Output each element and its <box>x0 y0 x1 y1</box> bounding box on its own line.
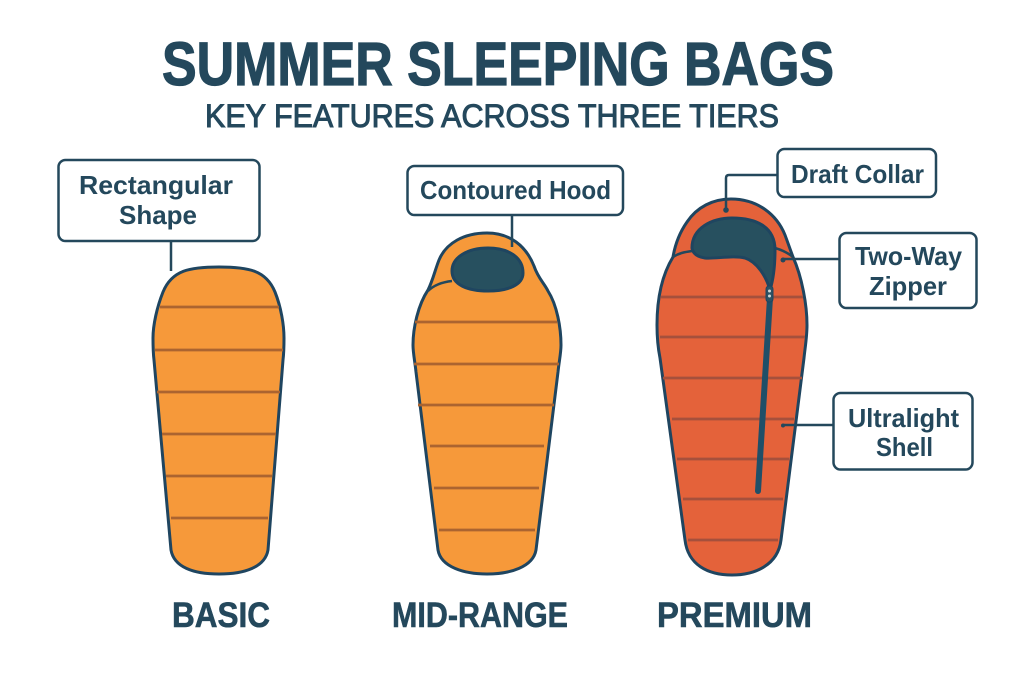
callout: rectangular shape: Shape <box>119 200 197 230</box>
panel: mid-range sleeping bag <box>392 166 623 635</box>
hood opening: mid-range <box>452 248 523 291</box>
draft collar and hood opening: premium <box>692 218 775 290</box>
leader: rectangular shape <box>170 241 172 271</box>
callout: rectangular shape: Rectangular <box>79 170 233 200</box>
leader: two-way zipper <box>780 258 839 262</box>
callout: ultralight shell <box>834 393 972 470</box>
hood seam: mid-range <box>428 281 452 291</box>
bag baffles: basic <box>155 307 283 518</box>
callout: contoured hood <box>408 166 623 215</box>
leader: ultralight shell <box>781 424 833 428</box>
callout: rectangular shape <box>58 160 260 241</box>
label: mid-range: MID-RANGE <box>392 596 568 635</box>
subtitle: KEY FEATURES ACROSS THREE TIERS <box>205 98 779 134</box>
callout: contoured hood: Contoured Hood <box>420 175 611 205</box>
bag body: mid-range <box>413 233 561 574</box>
callout: two-way zipper: Zipper <box>869 271 947 301</box>
label: premium: PREMIUM <box>657 596 812 635</box>
leader: draft collar <box>723 175 777 213</box>
callout: draft collar: Draft Collar <box>791 159 924 189</box>
bag baffles: premium <box>660 297 805 540</box>
label: basic: BASIC <box>172 596 270 635</box>
callout: draft collar <box>778 149 936 197</box>
zipper track <box>758 298 770 491</box>
callout: two-way zipper <box>840 233 976 308</box>
callout: ultralight shell: Shell <box>876 432 933 462</box>
bag baffles: mid-range <box>414 322 559 530</box>
bag body: basic <box>153 267 284 574</box>
panel: basic sleeping bag <box>58 160 284 635</box>
panel: premium sleeping bag <box>657 149 976 635</box>
bag body: premium <box>657 199 807 575</box>
callout: ultralight shell: Ultralight <box>848 403 959 433</box>
zipper pull <box>766 286 773 302</box>
leader: contoured hood <box>511 215 513 247</box>
callout: two-way zipper: Two-Way <box>855 241 963 271</box>
title: SUMMER SLEEPING BAGS <box>162 30 834 98</box>
hood seams: premium <box>673 248 793 257</box>
